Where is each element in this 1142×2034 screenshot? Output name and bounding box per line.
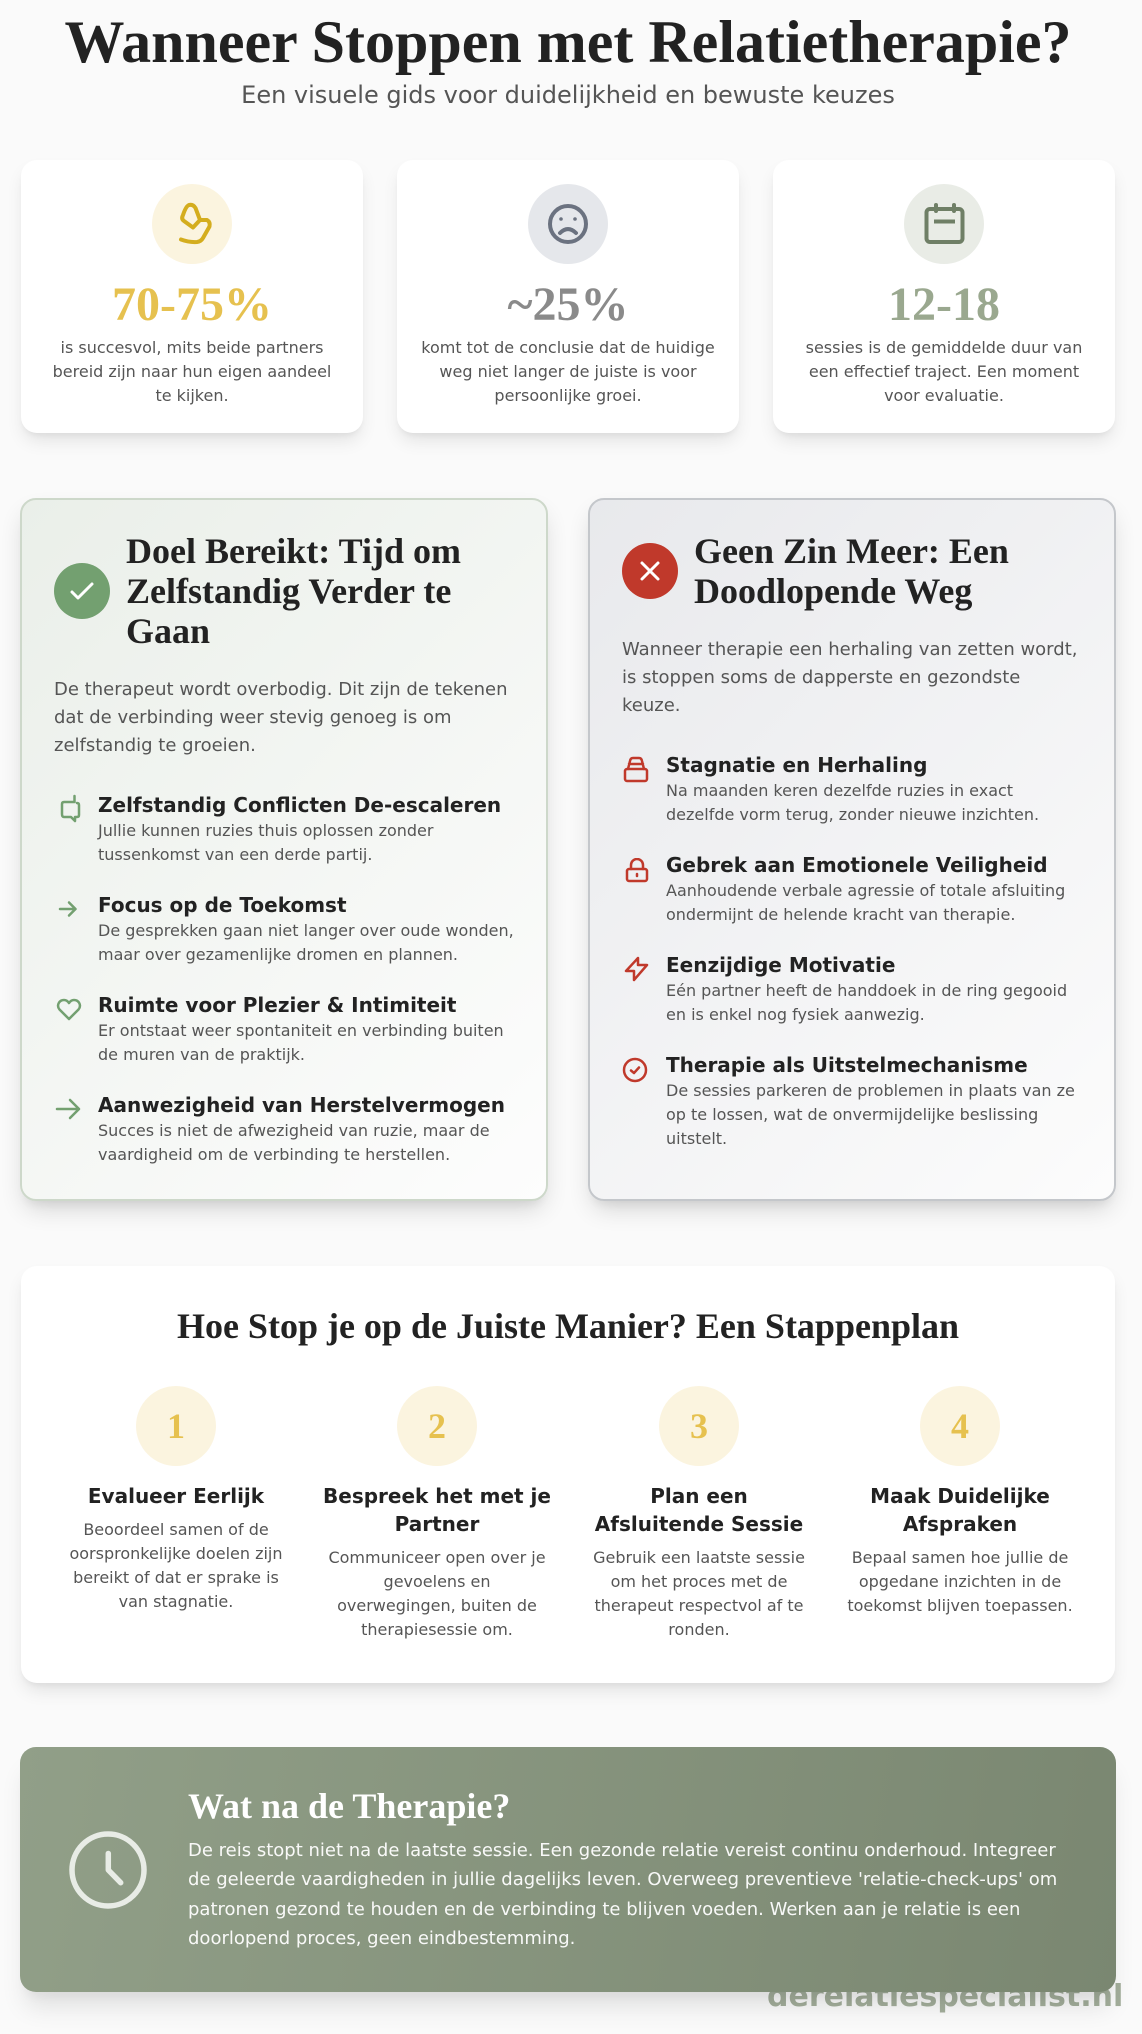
watermark: derelatiespecialist.nl [767,1979,1123,2014]
step text: om het proces met de [611,1572,787,1591]
item: conflicten de-escaleren [60,793,501,864]
number badge: 3 [690,1406,708,1446]
item title: Therapie als Uitstelmechanisme [666,1053,1028,1077]
step 2 [323,1386,551,1639]
step text: toekomst blijven toepassen. [847,1596,1073,1615]
step text: oorspronkelijke doelen zijn [69,1544,283,1563]
item text: maar over gezamenlijke dromen en plannen. [98,945,458,964]
step title: Plan een [650,1484,748,1508]
panel intro: dat de verbinding weer stevig genoeg is om [54,707,452,728]
panel: doel bereikt [20,498,548,1201]
step text: bereikt of dat er sprake is [73,1568,279,1587]
panel heading [694,531,1009,611]
number badge [397,1386,477,1466]
number badge [920,1386,1000,1466]
item text: uitstelt. [666,1129,727,1148]
step text: gevoelens en [384,1572,490,1591]
stat description: weg niet langer de juiste is voor [439,362,697,381]
step 3 [579,1386,819,1646]
panel intro: Wanneer therapie een herhaling van zetten wordt, [622,638,1077,660]
item text [97,821,434,864]
panel intro: keuze. [622,695,681,716]
step title: Bespreek het met je [323,1484,551,1508]
icon: heart [56,998,82,1020]
step text: overwegingen, buiten de [337,1596,537,1615]
step title: Afspraken [903,1512,1017,1536]
item: eenzijdige motivatie [624,953,1067,1024]
icon: check circle [622,1058,648,1082]
step title [579,1482,819,1538]
title: Wanneer Stoppen met Relatietherapie? [64,9,1072,75]
item text: Er ontstaat weer spontaniteit en verbinding buiten [98,1021,504,1040]
panel: geen zin meer [588,498,1116,1201]
step text: Bepaal samen hoe jullie de [852,1548,1068,1567]
icon: stack box [624,756,648,782]
step text [579,1546,819,1642]
icon: check badge [54,563,110,619]
stat value: 70-75% [112,278,272,331]
stat description [421,338,715,405]
item text: vaardigheid om de verbinding te herstellen. [98,1145,450,1164]
step 1 [69,1386,283,1611]
stat description: een effectief traject. Een moment [809,362,1079,381]
item text: Succes is niet de afwezigheid van ruzie, maar de [98,1121,490,1140]
step text [840,1546,1080,1618]
item text [666,781,1039,824]
step title [323,1484,551,1536]
item: uitstelmechanisme [622,1053,1075,1148]
item text: Eén partner heeft de handdoek in de ring gegooid [666,981,1067,1000]
icon: long arrow [56,1098,80,1120]
panel intro: zelfstandig te groeien. [54,735,256,756]
stat card: 12-18 [773,160,1115,433]
step 4 [840,1386,1080,1646]
stat description: is succesvol, mits beide partners [61,338,323,357]
item text [666,881,1065,924]
panel heading: Doel Bereikt: Tijd om [126,531,461,571]
icon: clock [68,1830,148,1910]
panel heading: Zelfstandig Verder te [126,571,451,611]
panel heading: Doodlopende Weg [694,571,972,611]
step text: therapiesessie om. [361,1620,513,1639]
item text: ondermijnt de helende kracht van therapie. [666,905,1015,924]
panel intro: De therapeut wordt overbodig. Dit zijn de tekenen [54,678,508,700]
icon: bolt [624,956,648,982]
stat card: 70-75% [21,160,363,433]
panel heading: Gaan [126,611,210,651]
item title: Gebrek aan Emotionele Veiligheid [666,853,1048,877]
step text: opgedane inzichten in de [859,1572,1061,1591]
step title: Evalueer Eerlijk [88,1484,264,1508]
item title: Ruimte voor Plezier & Intimiteit [98,993,456,1017]
icon: arrow [58,901,77,917]
stat description [806,338,1082,405]
callout text: patronen gezond te houden en de verbinding te blijven voeden. Werken aan je relatie is een [188,1899,1020,1920]
item text [98,921,514,964]
item text: Aanhoudende verbale agressie of totale afsluiting [666,881,1065,900]
item text: tussenkomst van een derde partij. [98,845,372,864]
item title: Stagnatie en Herhaling [666,753,927,777]
panel heading: Geen Zin Meer: Een [694,531,1009,571]
step text: van stagnatie. [119,1592,233,1611]
icon: calendar [904,184,984,264]
stat description: sessies is de gemiddelde duur van [806,338,1082,357]
item text: De sessies parkeren de problemen in plaats van ze [666,1081,1075,1100]
item text: De gesprekken gaan niet langer over oude wonden, [98,921,514,940]
stat description: te kijken. [155,386,229,405]
callout text [188,1836,1057,1954]
step title: Maak Duidelijke [870,1484,1050,1508]
stat value: ~25% [508,278,628,331]
item title: Focus op de Toekomst [98,893,347,917]
stat description: komt tot de conclusie dat de huidige [421,338,715,357]
icon: speech bubble [60,794,80,822]
step title: Partner [395,1512,479,1536]
panel intro [622,638,1077,716]
icon: lock [626,858,648,882]
item text [666,981,1067,1024]
callout text: De reis stopt niet na de laatste sessie. Een gezonde relatie vereist continu onderhoud. Integreer [188,1840,1056,1861]
item text [98,1121,490,1164]
callout text: doorlopend proces, geen eindbestemming. [188,1928,575,1949]
section heading: Hoe Stop je op de Juiste Manier? Een Stappenplan [177,1306,959,1346]
step text [317,1546,557,1642]
item title: Zelfstandig Conflicten De-escaleren [98,793,501,817]
step text: Communiceer open over je [328,1548,546,1567]
stat description [53,338,331,405]
item: emotionele veiligheid [626,853,1065,924]
number badge [659,1386,739,1466]
item title: Eenzijdige Motivatie [666,953,895,977]
step title [840,1482,1080,1538]
item title: Aanwezigheid van Herstelvermogen [98,1093,505,1117]
item text: en is enkel nog fysiek aanwezig. [666,1005,925,1024]
item text: dezelfde vorm terug, zonder nieuwe inzichten. [666,805,1039,824]
item text: Jullie kunnen ruzies thuis oplossen zonder [98,821,433,840]
icon: sad face [528,184,608,264]
callout heading: Wat na de Therapie? [188,1786,510,1826]
step text: ronden. [668,1620,730,1639]
stat card: ~25% [397,160,739,433]
number badge: 4 [951,1406,969,1446]
number badge [136,1386,216,1466]
item: stagnatie [624,753,1039,824]
item text: Na maanden keren dezelfde ruzies in exact [666,781,1013,800]
number badge: 1 [167,1406,185,1446]
item: focus op de toekomst [58,893,514,964]
item text: de muren van de praktijk. [98,1045,305,1064]
stat description: persoonlijke groei. [494,386,642,405]
step text: Beoordeel samen of de [83,1520,269,1539]
item: herstelvermogen [56,1093,505,1164]
icon: cross badge [622,543,678,599]
number badge: 2 [428,1406,446,1446]
item text [666,1081,1075,1148]
panel: wat na de therapie [20,1747,1116,1992]
step title: Afsluitende Sessie [595,1512,803,1536]
panel intro [54,678,508,756]
item text: op te lossen, wat de onvermijdelijke beslissing [666,1105,1038,1124]
stat value: 12-18 [888,278,1000,331]
panel intro: is stoppen soms de dapperste en gezondste [622,667,1020,688]
panel: stappenplan [21,1266,1115,1683]
step text: therapeut respectvol af te [594,1596,804,1615]
icon: hand [152,184,232,264]
stat description: voor evaluatie. [884,386,1004,405]
item: plezier en intimiteit [56,993,504,1064]
step text: Gebruik een laatste sessie [593,1548,805,1567]
step text [69,1520,283,1611]
stat description: bereid zijn naar hun eigen aandeel [53,362,331,381]
subtitle: Een visuele gids voor duidelijkheid en bewuste keuzes [241,81,895,109]
callout text: de geleerde vaardigheden in jullie dagelijks leven. Overweeg preventieve 'relatie-check-ups' om [188,1869,1057,1890]
panel heading [126,531,461,651]
item text [98,1021,504,1064]
